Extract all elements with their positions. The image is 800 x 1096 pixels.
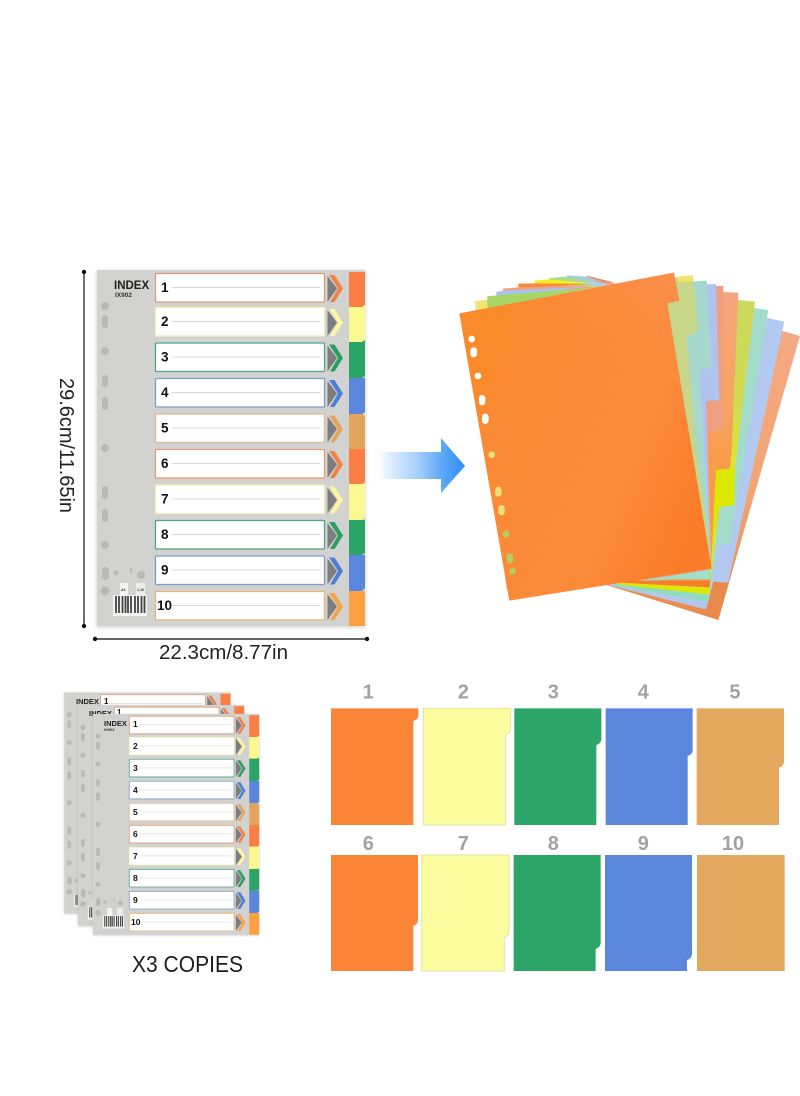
blue divider bbox=[567, 275, 784, 609]
middle copy: INDEX bbox=[89, 709, 112, 718]
front copy: IX902 bbox=[104, 727, 115, 732]
height dimension line bbox=[82, 270, 86, 628]
strips along the bottom edge bbox=[608, 569, 712, 609]
row numbers: 2 bbox=[161, 314, 169, 329]
front orange divider bbox=[459, 273, 712, 601]
pale blue divider bbox=[496, 284, 719, 580]
swatch 2 bbox=[423, 708, 511, 825]
swatch 4 bbox=[606, 708, 693, 825]
model code: IX902 bbox=[115, 292, 132, 299]
swatch numbers: 3 bbox=[548, 681, 559, 703]
index heading: INDEX bbox=[114, 280, 149, 292]
row numbers: 4 bbox=[161, 385, 169, 400]
row numbers: 9 bbox=[161, 562, 169, 578]
swatch 10 bbox=[697, 855, 785, 971]
swatch numbers: 1 bbox=[363, 681, 374, 703]
copies caption: X3 COPIES bbox=[132, 951, 243, 977]
swatch 6 bbox=[331, 855, 418, 971]
row numbers: 3 bbox=[161, 350, 169, 364]
swatch numbers: 5 bbox=[729, 681, 741, 703]
row numbers: 5 bbox=[161, 420, 169, 436]
green divider bbox=[549, 278, 768, 602]
row numbers bbox=[157, 280, 172, 613]
front copy: 5 bbox=[133, 807, 138, 817]
swatch numbers: 6 bbox=[363, 833, 374, 855]
swatch numbers: 10 bbox=[722, 833, 744, 855]
row numbers: 10 bbox=[157, 598, 172, 613]
front copy: 3 bbox=[133, 763, 138, 773]
front copy: 4 bbox=[133, 785, 138, 795]
back copy: INDEX bbox=[76, 697, 99, 706]
height label: 29.6cm/11.65in bbox=[55, 378, 77, 513]
index sheet with tabs bbox=[97, 270, 365, 627]
row numbers: 7 bbox=[161, 492, 169, 506]
pale green divider bbox=[487, 281, 712, 580]
swatch 7 bbox=[422, 855, 509, 971]
back copy: 1 bbox=[104, 697, 109, 706]
back salmon divider bbox=[587, 276, 800, 620]
front copy: 9 bbox=[133, 895, 138, 905]
swatch numbers: 2 bbox=[458, 681, 469, 703]
photo of fanned translucent dividers bbox=[459, 273, 800, 620]
front copy: 6 bbox=[133, 829, 138, 839]
middle copy bbox=[78, 705, 244, 926]
front copy: 7 bbox=[133, 851, 138, 861]
punch holes bbox=[468, 336, 516, 575]
middle copy: 1 bbox=[117, 708, 122, 717]
front copy: 8 bbox=[133, 873, 138, 883]
swatch numbers bbox=[363, 681, 744, 855]
swatch 3 bbox=[514, 708, 601, 825]
front copy: 10 bbox=[131, 917, 141, 927]
arrow bbox=[378, 438, 465, 493]
front copy: 1 bbox=[133, 719, 138, 729]
swatch numbers: 4 bbox=[638, 681, 649, 703]
width dimension line bbox=[93, 637, 369, 641]
row numbers: 1 bbox=[161, 280, 169, 295]
salmon divider bbox=[503, 286, 723, 580]
pale yellow divider bbox=[475, 275, 710, 590]
swatch numbers: 8 bbox=[548, 833, 559, 855]
swatch numbers: 7 bbox=[458, 833, 469, 855]
three stacked copies bbox=[64, 693, 259, 935]
front copy: INDEX bbox=[104, 719, 127, 728]
back copy bbox=[64, 693, 230, 914]
swatch numbers: 9 bbox=[638, 833, 649, 855]
swatch 1 bbox=[331, 708, 418, 825]
swatch 5 bbox=[697, 708, 784, 825]
colour swatch grid bbox=[331, 681, 785, 971]
width label: 22.3cm/8.77in bbox=[159, 642, 288, 664]
tips of strips along the top edge bbox=[475, 275, 615, 310]
size tag: A4 bbox=[121, 588, 126, 592]
orange divider bbox=[518, 284, 738, 587]
front copy: 2 bbox=[133, 741, 138, 751]
front copy bbox=[93, 714, 259, 935]
swatch 9 bbox=[605, 855, 692, 971]
row numbers: 6 bbox=[161, 456, 169, 471]
swatch 8 bbox=[514, 855, 601, 971]
row numbers: 8 bbox=[161, 527, 169, 542]
yellow divider bbox=[535, 281, 755, 594]
range tag: 1-10 bbox=[137, 588, 144, 592]
